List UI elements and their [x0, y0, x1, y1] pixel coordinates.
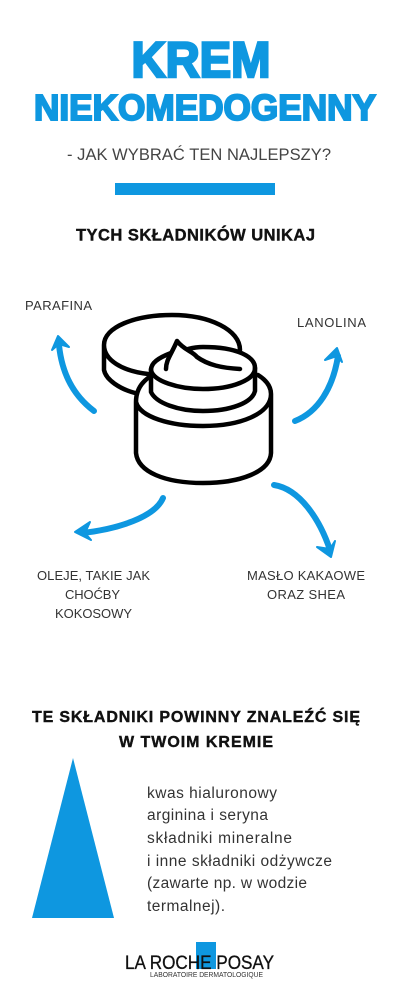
list of recommended ingredients: termalnej). — [147, 898, 225, 915]
list of recommended ingredients: arginina i seryna — [147, 807, 268, 824]
list of recommended ingredients: i inne składniki odżywcze — [147, 853, 332, 870]
heading: recommended ingredients: W TWOIM KREMIE — [119, 734, 273, 751]
title: NIEKOMEDOGENNY — [34, 87, 376, 128]
label: parafina: PARAFINA — [25, 298, 92, 313]
jar inner rim — [151, 347, 255, 389]
list of recommended ingredients: (zawarte np. w wodzie — [147, 875, 307, 892]
logo tagline: LABORATOIRE DERMATOLOGIQUE — [150, 970, 263, 979]
label: oils: CHOĆBY — [65, 587, 120, 602]
list of recommended ingredients: składniki mineralne — [147, 830, 292, 847]
subtitle: - JAK WYBRAĆ TEN NAJLEPSZY? — [67, 145, 331, 164]
icon: cream jar — [104, 315, 271, 483]
arrow: to oils — [75, 498, 163, 540]
label: cocoa and shea butter — [247, 568, 365, 602]
jar lid — [104, 315, 240, 393]
label: oils: KOKOSOWY — [55, 606, 132, 621]
logo wordmark: LA ROCHE POSAY — [125, 953, 274, 974]
heading: recommended ingredients: TE SKŁADNIKI POWINNY ZNALEŹĆ SIĘ — [32, 707, 360, 726]
title divider bar — [115, 183, 275, 195]
arrow: to parafina — [52, 336, 94, 411]
label: oils: OLEJE, TAKIE JAK — [37, 568, 150, 583]
title: KREM — [132, 32, 270, 88]
label: cocoa and shea butter: MASŁO KAKAOWE — [247, 568, 365, 583]
arrow: to lanolina — [295, 348, 342, 421]
list of recommended ingredients: kwas hialuronowy — [147, 785, 277, 802]
jar inner collar — [151, 368, 255, 411]
label: oils — [37, 568, 150, 621]
logo blue square — [196, 942, 216, 969]
title — [34, 32, 376, 128]
jar body — [136, 375, 271, 483]
label: cocoa and shea butter: ORAZ SHEA — [267, 587, 345, 602]
icon: blue triangle — [32, 758, 114, 918]
cream swirl — [166, 341, 240, 369]
arrow: to cocoa butter — [274, 485, 335, 557]
logo: La Roche-Posay — [125, 942, 274, 979]
label: lanolina: LANOLINA — [297, 315, 366, 330]
heading: ingredients to avoid: TYCH SKŁADNIKÓW UNIKAJ — [76, 226, 315, 244]
list of recommended ingredients — [147, 785, 332, 915]
heading: recommended ingredients — [32, 707, 360, 751]
